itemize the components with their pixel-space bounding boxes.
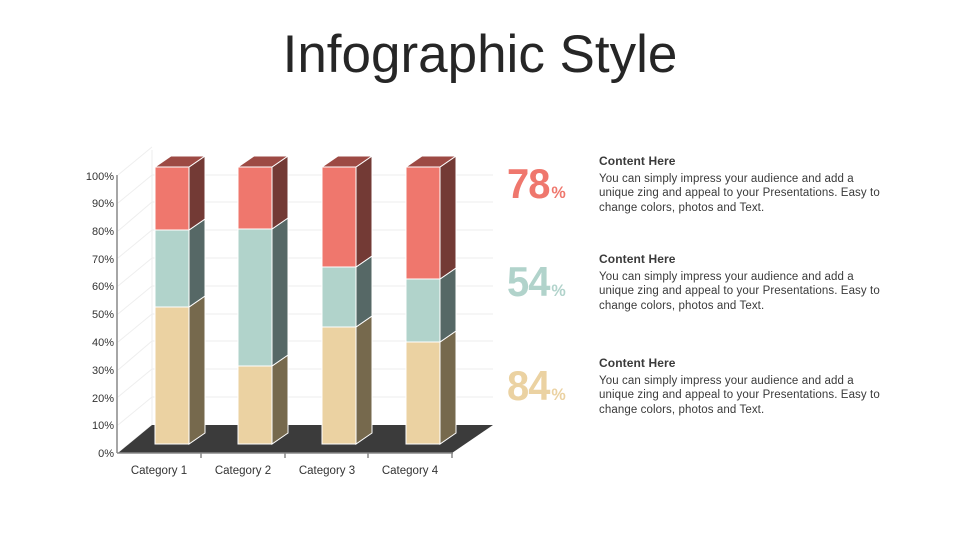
y axis labels: 70% [92,254,114,266]
axis [117,175,453,458]
text block 3: Content Here [599,356,676,370]
stat: 84%: 84% [507,362,565,409]
stat: 54%: 54% [507,258,565,305]
bar 2 [238,156,288,444]
y axis labels: 30% [92,365,114,377]
x axis labels: Category 4 [382,465,439,477]
y axis labels: 60% [92,281,114,293]
floor [118,425,493,453]
text block 2: You can simply impress your audience and add a unique zing and appeal to your Presentations. Easy to change colors, photos and Text. [599,270,880,312]
y axis labels: 0% [98,448,114,460]
bar 3 [322,156,372,444]
y axis labels: 10% [92,420,114,432]
bar 4 [406,156,456,444]
text block 1: You can simply impress your audience and add a unique zing and appeal to your Presentations. Easy to change colors, photos and Text. [599,172,880,214]
bars [155,156,456,444]
x axis labels [131,465,439,477]
x axis labels: Category 3 [299,465,355,477]
y axis labels [86,171,114,460]
text block 2 [599,252,880,312]
x axis labels: Category 1 [131,465,187,477]
y axis labels: 50% [92,309,114,321]
text block 2: Content Here [599,252,676,266]
text block 3: You can simply impress your audience and add a unique zing and appeal to your Presentations. Easy to change colors, photos and Text. [599,374,880,416]
title: Infographic Style [283,25,677,84]
bar 1 [155,156,205,444]
text block 1: Content Here [599,154,676,168]
y axis labels: 80% [92,226,114,238]
y axis labels: 20% [92,393,114,405]
stat: 78%: 78% [507,160,565,207]
y axis labels: 100% [86,171,114,183]
text block 1 [599,154,880,214]
y axis labels: 40% [92,337,114,349]
x axis labels: Category 2 [215,465,271,477]
text block 3 [599,356,880,416]
y axis labels: 90% [92,198,114,210]
